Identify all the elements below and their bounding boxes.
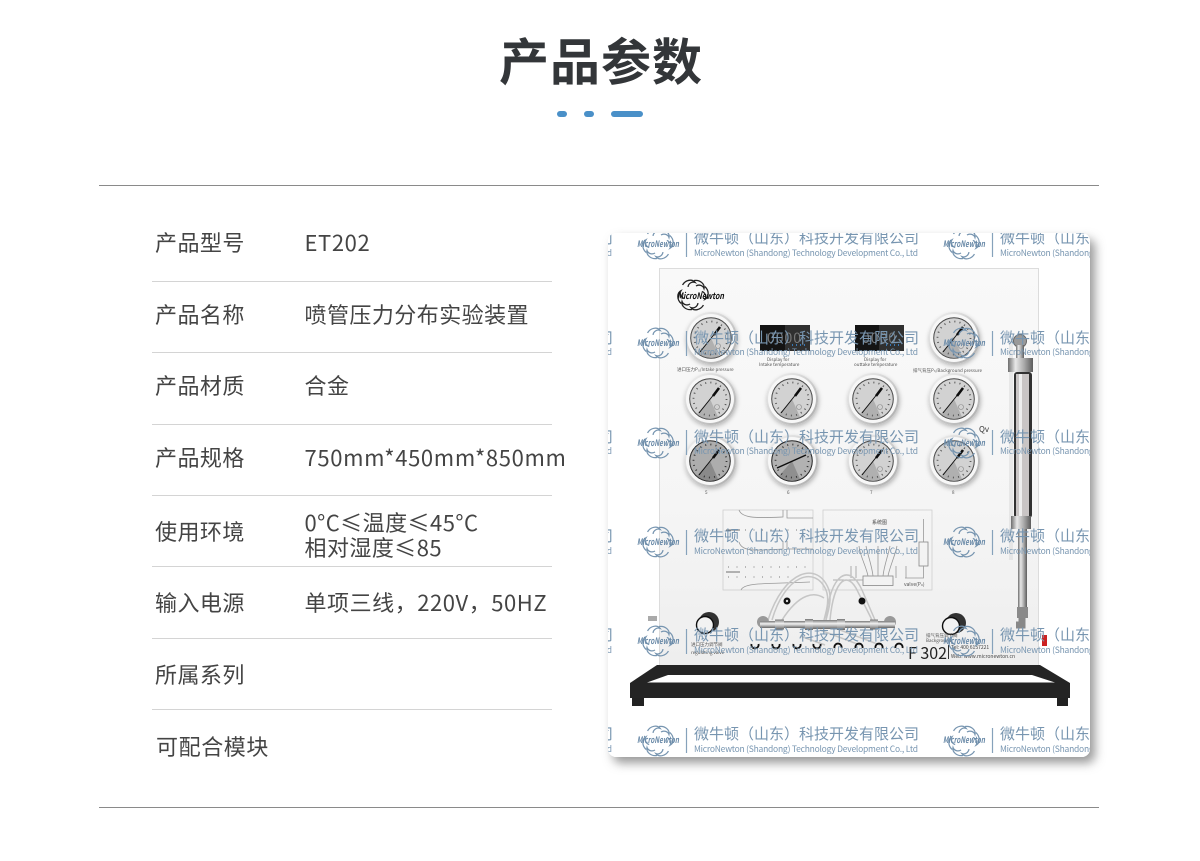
watermark row 1: MicroNewton (943, 237, 986, 250)
title accent dots (557, 111, 643, 117)
gauge and display labels: 5 (705, 490, 708, 496)
row label: material: 产品材质 (155, 369, 245, 401)
row value: power: 单项三线，220V，50HZ (304, 586, 547, 618)
watermark row 6 (388, 723, 1200, 759)
connecting tubes (768, 573, 880, 645)
watermark row 5: MicroNewton (943, 634, 986, 647)
row label: power: 输入电源 (155, 586, 245, 618)
flow schematic diagrams (723, 510, 932, 590)
gauge and display labels: Qv (979, 424, 990, 435)
flow schematic diagrams: valve(Pₙ) (904, 581, 925, 588)
row label: environment: 使用环境 (155, 515, 245, 547)
watermark row 5: 微牛顿（山东）科技开发有限公司 (694, 624, 919, 645)
panel footer text: F 302 (908, 640, 947, 664)
row label: series: 所属系列 (155, 658, 245, 690)
watermark row 3: MicroNewton (637, 436, 680, 449)
row label: name: 产品名称 (155, 298, 245, 330)
flow schematic diagrams: 系统图 (872, 519, 887, 526)
gauge and display labels (677, 356, 990, 496)
gauge and display labels: Display for (864, 356, 887, 363)
title: 产品参数 (499, 23, 703, 95)
panel footer text: Background (926, 637, 952, 644)
watermark row 2: MicroNewton (637, 336, 680, 349)
stand frame (630, 665, 1070, 706)
watermark row 6: MicroNewton (637, 733, 680, 746)
watermark row 1: MicroNewton (637, 237, 680, 250)
watermark row 1: MicroNewton (Shandong) Technology Development Co., Ltd (694, 247, 918, 259)
black fittings (751, 598, 903, 648)
row label: model: 产品型号 (155, 226, 245, 258)
watermark row 3: 微牛顿（山东）科技开发有限公司 (694, 426, 919, 447)
watermark row 5: MicroNewton (Shandong) Technology Development Co., Ltd (694, 644, 918, 656)
temperature displays (760, 325, 904, 351)
nozzle pipe assembly (757, 616, 896, 630)
gauge and display labels: 8 (952, 490, 955, 496)
watermark row 4: 微牛顿（山东）科技开发有限公司 (694, 525, 919, 546)
machine backboard (660, 268, 1038, 666)
row label: size: 产品规格 (155, 441, 245, 473)
watermark row 6: MicroNewton (943, 733, 986, 746)
panel brand logo: MicroNewton (677, 289, 725, 302)
panel footer text: Tel: 400 6157221 (951, 644, 989, 651)
watermark row 3: MicroNewton (Shandong) Technology Development Co., Ltd (694, 445, 918, 457)
gauge and display labels: 6 (787, 490, 790, 496)
pressure gauges (684, 312, 980, 487)
watermark row 2 (388, 325, 1200, 361)
panel footer text: 排气背压调节阀 (926, 632, 958, 639)
flow meter column (1008, 334, 1047, 646)
panel footer text (691, 632, 1015, 664)
watermark row 6: 微牛顿（山东）科技开发有限公司 (694, 723, 919, 744)
watermark row 2: 微牛顿（山东）科技开发有限公司 (694, 327, 919, 348)
watermark row 4: MicroNewton (943, 535, 986, 548)
row value: material: 合金 (304, 369, 349, 401)
watermark row 5 (388, 623, 1200, 659)
watermark row 1 (388, 226, 1200, 262)
temperature displays: 0000 (862, 328, 897, 348)
row value: environment (304, 506, 478, 563)
watermark row 2: MicroNewton (943, 336, 986, 349)
panel brand logo (675, 277, 725, 313)
row value: name: 喷管压力分布实验装置 (304, 298, 529, 330)
watermark row 2: MicroNewton (Shandong) Technology Development Co., Ltd (694, 346, 918, 358)
gauge and display labels: Display for (767, 356, 790, 363)
watermark row 6: MicroNewton (Shandong) Technology Development Co., Ltd (694, 743, 918, 755)
row value: environment: 0°C≤温度≤45°C (304, 506, 478, 538)
watermark row 3 (388, 425, 1200, 461)
watermark row 4: MicroNewton (Shandong) Technology Development Co., Ltd (694, 545, 918, 557)
panel footer text: Web: www.micronewton.cn (951, 653, 1015, 660)
gauge and display labels: Intake temperature (759, 361, 800, 368)
watermark row 5: MicroNewton (637, 634, 680, 647)
watermark row 3: MicroNewton (943, 436, 986, 449)
gauge and display labels: outtake temperature (854, 361, 898, 368)
gauge and display labels: 排气背压Pₙ/Background pressure (913, 367, 982, 374)
product photo (608, 233, 1090, 757)
watermark row 4: MicroNewton (637, 535, 680, 548)
gauge and display labels: 7 (870, 490, 873, 496)
row label: compatible modules: 可配合模块 (156, 730, 269, 762)
panel footer text: 进口压力调节阀 (691, 641, 723, 648)
row value: size: 750mm*450mm*850mm (304, 441, 567, 473)
row value: environment: 相对湿度≤85 (304, 531, 442, 563)
temperature displays: 0000 (767, 328, 802, 348)
panel footer text: regulating valve (691, 649, 725, 656)
gauge and display labels: 进口压力P₀/Intake pressure (677, 366, 734, 373)
regulating valves (648, 612, 966, 634)
row value: model: ET202 (304, 226, 370, 258)
photo background (608, 233, 1090, 757)
watermark row 4 (388, 524, 1200, 560)
